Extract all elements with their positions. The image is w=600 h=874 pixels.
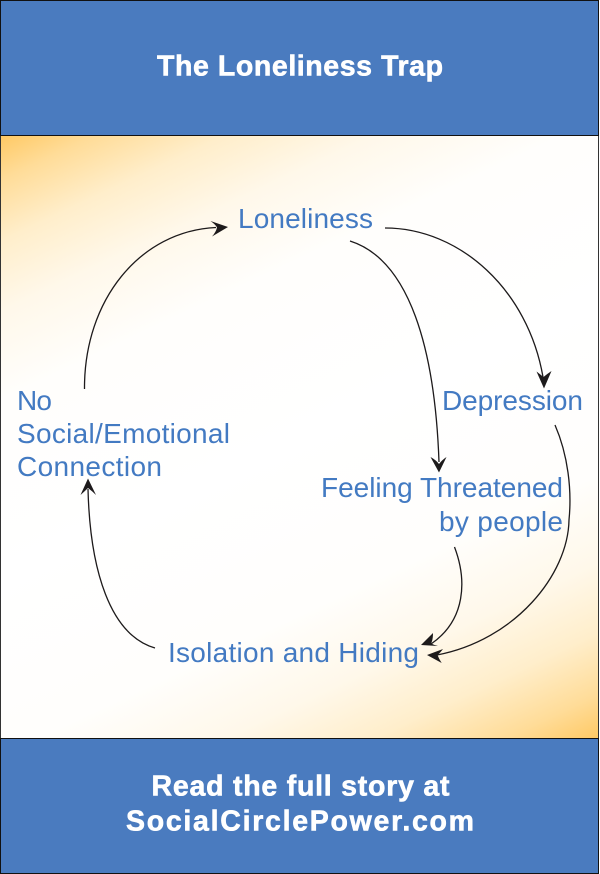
label: Feeling Threatened by people bbox=[321, 472, 563, 537]
footer website: SocialCirclePower.com bbox=[126, 806, 474, 838]
header banner bbox=[0, 0, 598, 136]
label: Loneliness: Loneliness bbox=[238, 203, 373, 234]
label: Feeling Threatened by people: Feeling Threatened bbox=[321, 472, 563, 503]
arrow: loneliness to depression bbox=[385, 228, 552, 388]
arrow: loneliness to feeling threatened bbox=[350, 241, 446, 472]
label: No Social/Emotional Connection: Connection bbox=[17, 451, 162, 482]
label: Depression: Depression bbox=[442, 385, 583, 416]
page background panel bbox=[0, 136, 598, 738]
arrow: isolation to no connection bbox=[80, 478, 155, 648]
label: No Social/Emotional Connection: Social/Emotional bbox=[17, 418, 230, 449]
title: The Loneliness Trap bbox=[157, 50, 443, 82]
label: Feeling Threatened by people: by people bbox=[439, 506, 563, 537]
arrow: no connection to loneliness bbox=[84, 221, 228, 389]
arrow: depression to isolation bbox=[427, 425, 570, 663]
label: Isolation and Hiding: Isolation and Hiding bbox=[168, 637, 419, 668]
label: No Social/Emotional Connection bbox=[17, 385, 230, 482]
arrow: feeling threatened to isolation bbox=[421, 547, 462, 646]
footer call to action: Read the full story at bbox=[152, 770, 450, 802]
footer banner bbox=[0, 738, 598, 874]
label: No Social/Emotional Connection: No bbox=[17, 385, 52, 416]
